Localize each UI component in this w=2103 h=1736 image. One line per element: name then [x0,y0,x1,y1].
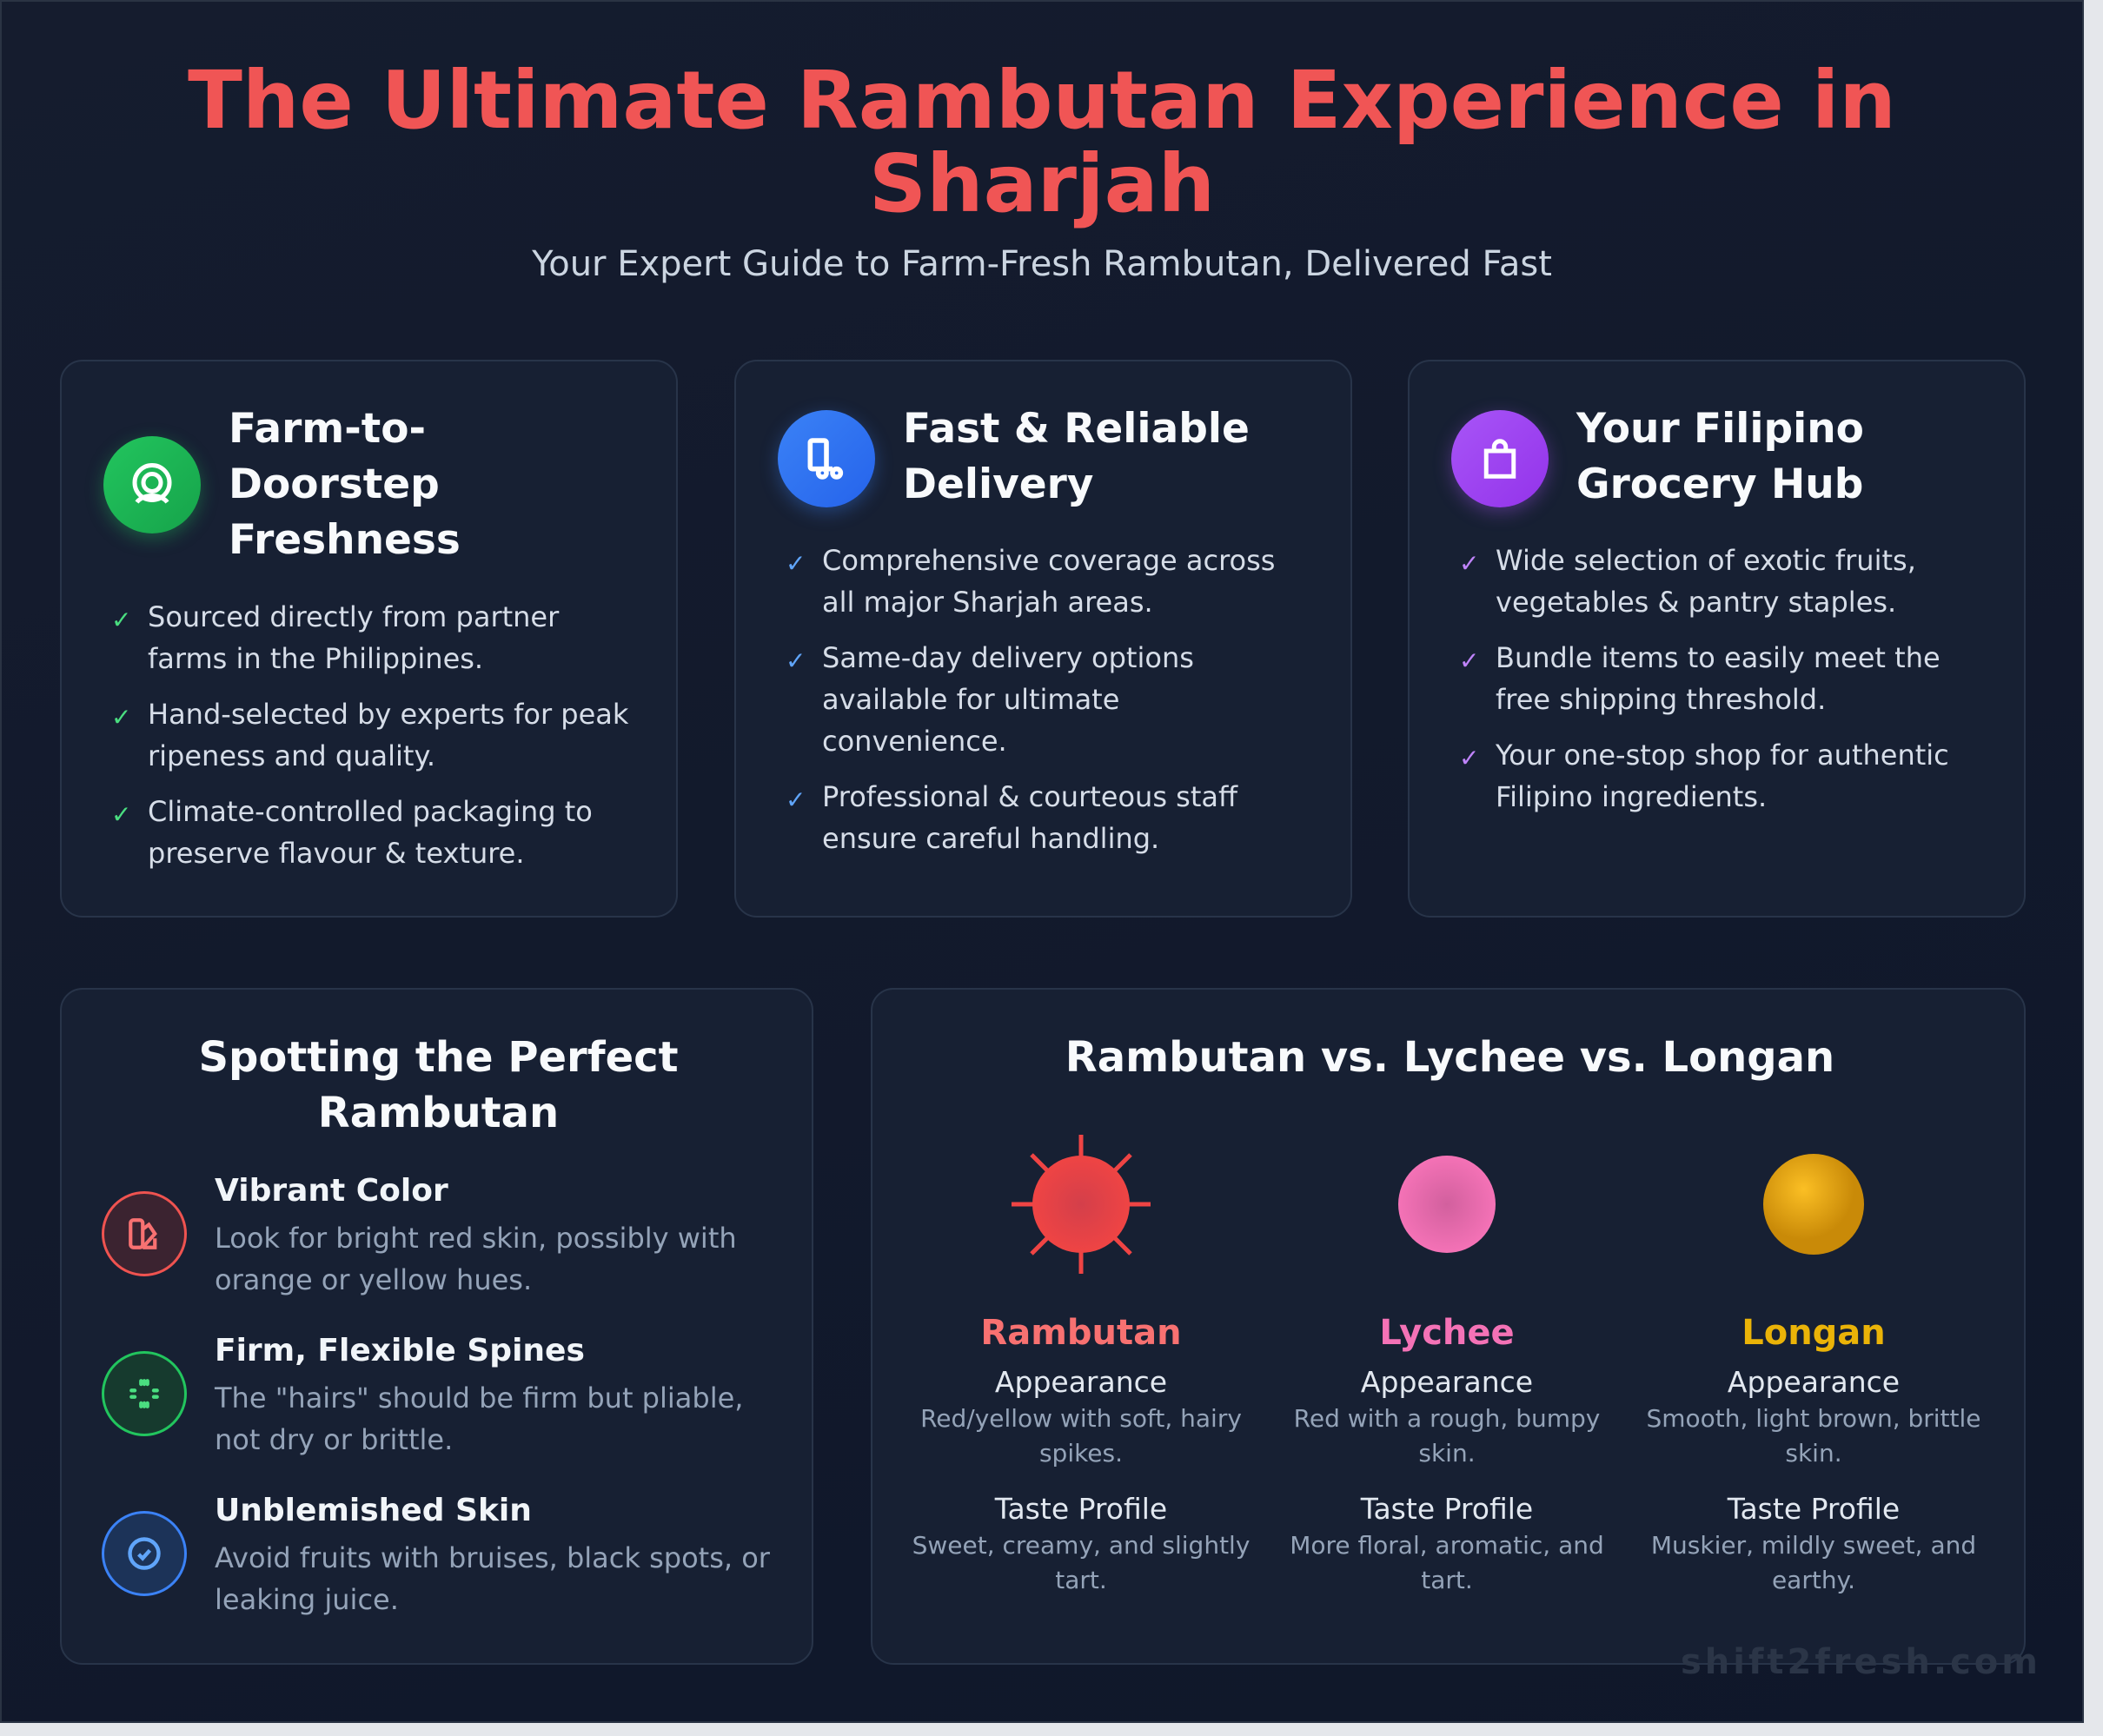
icon: check [102,1511,187,1596]
icon: bag [1451,410,1549,507]
column: lychee: Taste Profile [1361,1492,1533,1526]
column: lychee: Appearance [1361,1365,1533,1399]
icon: farm [103,436,201,533]
bullets: ✓ [786,785,806,814]
bullets: ✓ [786,646,806,675]
panel: grocery hub [1408,360,2026,918]
icon: swatch [102,1191,187,1276]
bullets: Wide selection of exotic fruits, vegetables & pantry staples. [1496,544,1916,619]
item: spines: Firm, Flexible Spines [215,1333,585,1368]
icon: lychee [1398,1156,1496,1253]
column: longan: Appearance [1728,1365,1900,1399]
column: lychee: Lychee [1379,1313,1515,1353]
item: skin: Avoid fruits with bruises, black spots, or leaking juice. [215,1541,770,1616]
icon: spines [102,1351,187,1436]
bullets [786,544,1275,855]
bullets: Your one-stop shop for authentic Filipino ingredients. [1496,739,1949,813]
heading: Doorstep [229,461,440,508]
bullets: Hand-selected by experts for peak ripeness and quality. [148,698,628,772]
column: lychee [1290,1313,1604,1594]
heading [903,405,1250,508]
bullets: Climate-controlled packaging to preserve flavour & texture. [148,795,593,870]
heading: Delivery [903,461,1093,508]
panel: delivery [734,360,1352,918]
heading: Grocery Hub [1576,461,1863,508]
bullets: Professional & courteous staff ensure careful handling. [822,780,1237,855]
icon: longan [1763,1154,1864,1255]
bullets [1459,544,1949,813]
panel: spotting the perfect rambutan [60,988,813,1665]
heading: Farm-to- [229,405,426,453]
item: spines: The "hairs" should be firm but pliable, not dry or brittle. [215,1382,743,1456]
heading: Spotting the Perfect [198,1033,679,1082]
heading: Fast & Reliable [903,405,1250,453]
bullets: ✓ [111,800,131,829]
heading: Your Filipino [1576,405,1864,453]
column: rambutan: Red/yellow with soft, hairy spikes. [920,1404,1242,1468]
heading: Rambutan [318,1089,559,1137]
bullets: Sourced directly from partner farms in the Philippines. [148,600,559,675]
item: skin [102,1493,770,1616]
panel: farm-to-doorstep [60,360,678,918]
heading [1576,405,1864,508]
panel: comparison [871,988,2026,1665]
heading: Freshness [229,516,461,564]
heading: Rambutan vs. Lychee vs. Longan [1065,1033,1834,1082]
bullets: ✓ [1459,549,1479,578]
icon: rambutan [1012,1135,1151,1274]
column: longan: Muskier, mildly sweet, and earthy. [1651,1531,1976,1594]
item: skin: Unblemished Skin [215,1493,532,1528]
column: longan: Smooth, light brown, brittle skin. [1646,1404,1981,1468]
bullets: Comprehensive coverage across all major Sharjah areas. [822,544,1275,619]
heading [229,405,461,564]
column: rambutan [912,1313,1250,1594]
heading [198,1033,679,1137]
bullets: Bundle items to easily meet the free shipping threshold. [1496,641,1940,716]
bullets [111,600,629,870]
watermark: shift2fresh.com [1681,1642,2041,1682]
title [188,54,1896,230]
title: The Ultimate Rambutan Experience in [188,54,1896,147]
column: longan: Taste Profile [1728,1492,1900,1526]
column: rambutan: Appearance [995,1365,1167,1399]
item: spines [102,1333,743,1456]
bullets: ✓ [786,549,806,578]
column: longan: Longan [1741,1313,1886,1353]
bullets: ✓ [111,606,131,634]
bullets: ✓ [111,703,131,732]
item: vibrant color: Look for bright red skin, possibly with orange or yellow hues. [215,1222,737,1296]
icon: truck [778,410,875,507]
title: Sharjah [869,137,1215,230]
bullets: Same-day delivery options available for ultimate convenience. [822,641,1194,758]
column: rambutan: Rambutan [980,1313,1182,1353]
subtitle: Your Expert Guide to Farm-Fresh Rambutan, Delivered Fast [532,244,1552,284]
column: rambutan: Sweet, creamy, and slightly tart. [912,1531,1250,1594]
column: longan [1646,1313,1981,1594]
column: lychee: Red with a rough, bumpy skin. [1294,1404,1600,1468]
bullets: ✓ [1459,744,1479,772]
item: vibrant color [102,1173,737,1296]
column: lychee: More floral, aromatic, and tart. [1290,1531,1604,1594]
bullets: ✓ [1459,646,1479,675]
column: rambutan: Taste Profile [995,1492,1167,1526]
item: vibrant color: Vibrant Color [215,1173,448,1209]
